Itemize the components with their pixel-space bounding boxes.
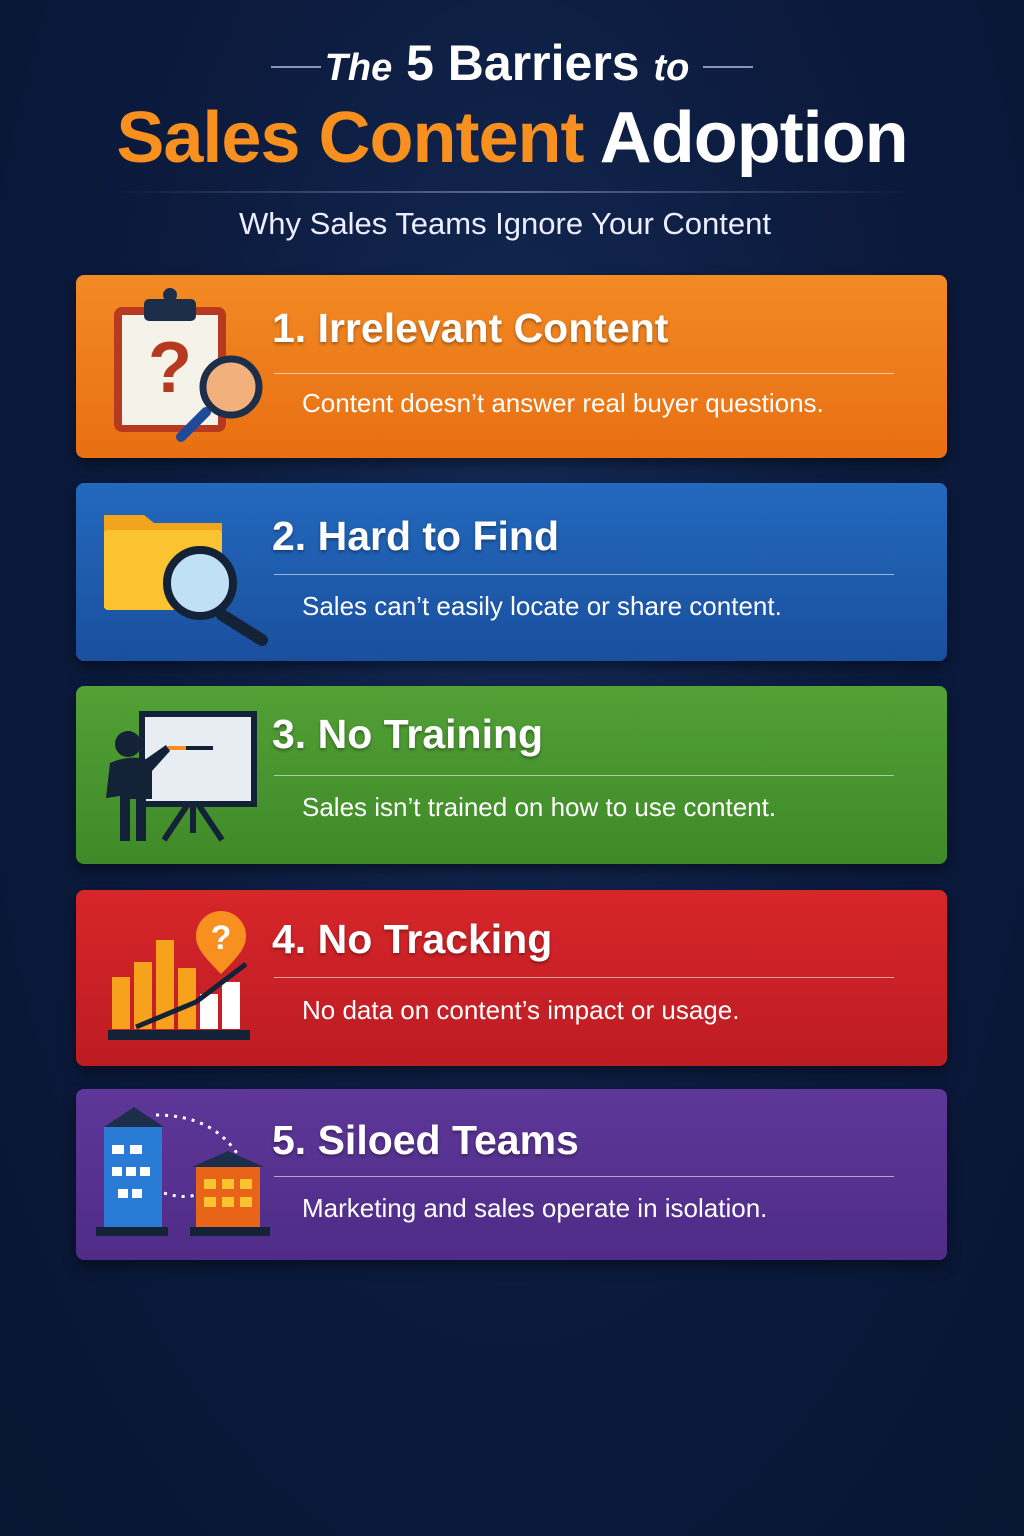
icon: clipboard with magnifier [114, 288, 262, 442]
subtitle: Why Sales Teams Ignore Your Content [239, 206, 771, 241]
icon: folder with magnifier [104, 515, 268, 646]
panel: hard to find: 2. Hard to Find [272, 513, 559, 559]
panel: no training: 3. No Training [272, 711, 543, 757]
title line 1: The 5 Barriers to [325, 35, 689, 91]
panel: hard to find: Sales can’t easily locate or share content. [302, 591, 782, 621]
panel: hard to find [76, 483, 947, 661]
panel: no training [76, 686, 947, 864]
panel: siloed teams [76, 1089, 947, 1260]
icon: two buildings [96, 1107, 270, 1236]
icon: bar chart with question pin [108, 911, 250, 1040]
panel: no tracking: 4. No Tracking [272, 916, 552, 962]
panel: siloed teams: Marketing and sales operate in isolation. [302, 1193, 767, 1223]
panel: no tracking: No data on content’s impact or usage. [302, 995, 739, 1025]
panel: irrelevant content [76, 275, 947, 458]
icon: clipboard with magnifier: ? [148, 328, 192, 408]
title [116, 35, 908, 178]
panel: no training: Sales isn’t trained on how to use content. [302, 792, 776, 822]
panel: siloed teams: 5. Siloed Teams [272, 1117, 579, 1163]
icon: bar chart with question pin: ? [211, 919, 231, 957]
panel: irrelevant content: 1. Irrelevant Content [272, 305, 668, 351]
panel: irrelevant content: Content doesn’t answer real buyer questions. [302, 388, 824, 418]
icon: presenter at whiteboard [106, 711, 257, 842]
title line 2: Sales Content Adoption [116, 98, 908, 178]
panel: no tracking [76, 890, 947, 1066]
